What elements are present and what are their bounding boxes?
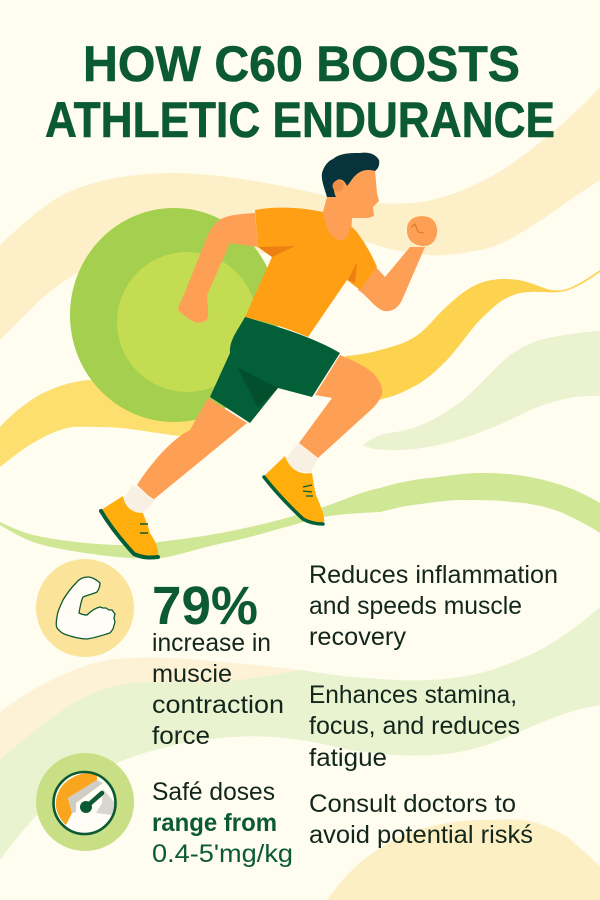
stat: 79 percent: contraction [152,691,284,719]
safe dose text [152,778,293,868]
shorts [210,317,340,423]
runner figure [101,153,437,558]
icon: dosage gauge [36,753,134,851]
front shoe [264,456,324,524]
benefit: inflammation: recovery [309,623,406,651]
caution: consult doctors [309,790,533,849]
icon: flexed muscle [36,559,134,657]
stat: 79 percent [152,576,284,750]
safe dose text: 0.4-5'mg/kg [152,840,293,868]
stat: 79 percent: 79% [152,576,258,636]
safe dose text: range from [152,809,277,837]
safe dose text: Safé doses [152,778,275,806]
background waves upper [0,87,600,558]
green target circle [70,208,278,422]
benefit: stamina: fatigue [309,744,387,772]
back leg [137,398,247,500]
shirt shadows [258,246,357,283]
caution: consult doctors: Consult doctors to [309,790,516,818]
title: HOW C60 BOOSTS [83,36,520,92]
benefit: inflammation [309,561,558,651]
hair and ear [322,153,379,197]
front leg [299,355,382,458]
socks [122,443,318,513]
stat: 79 percent: muscie [152,660,232,688]
shirt [245,208,377,337]
benefit: stamina [309,681,520,772]
benefit: inflammation: Reduces inflammation [309,561,558,589]
background waves lower [0,607,600,900]
neck and face [323,165,379,242]
caution: consult doctors: avoid potential riskś [309,821,533,849]
back shoe [101,496,158,558]
title [45,36,555,148]
stat: 79 percent: force [152,722,210,750]
front arm and fist [358,216,437,311]
back arm [178,213,258,323]
benefit: stamina: Enhances stamina, [309,681,517,709]
benefit: stamina: focus, and reduces [309,712,520,740]
shorts fold [237,367,278,408]
benefit: inflammation: and speeds muscle [309,592,522,620]
stat: 79 percent: increase in [152,629,271,657]
